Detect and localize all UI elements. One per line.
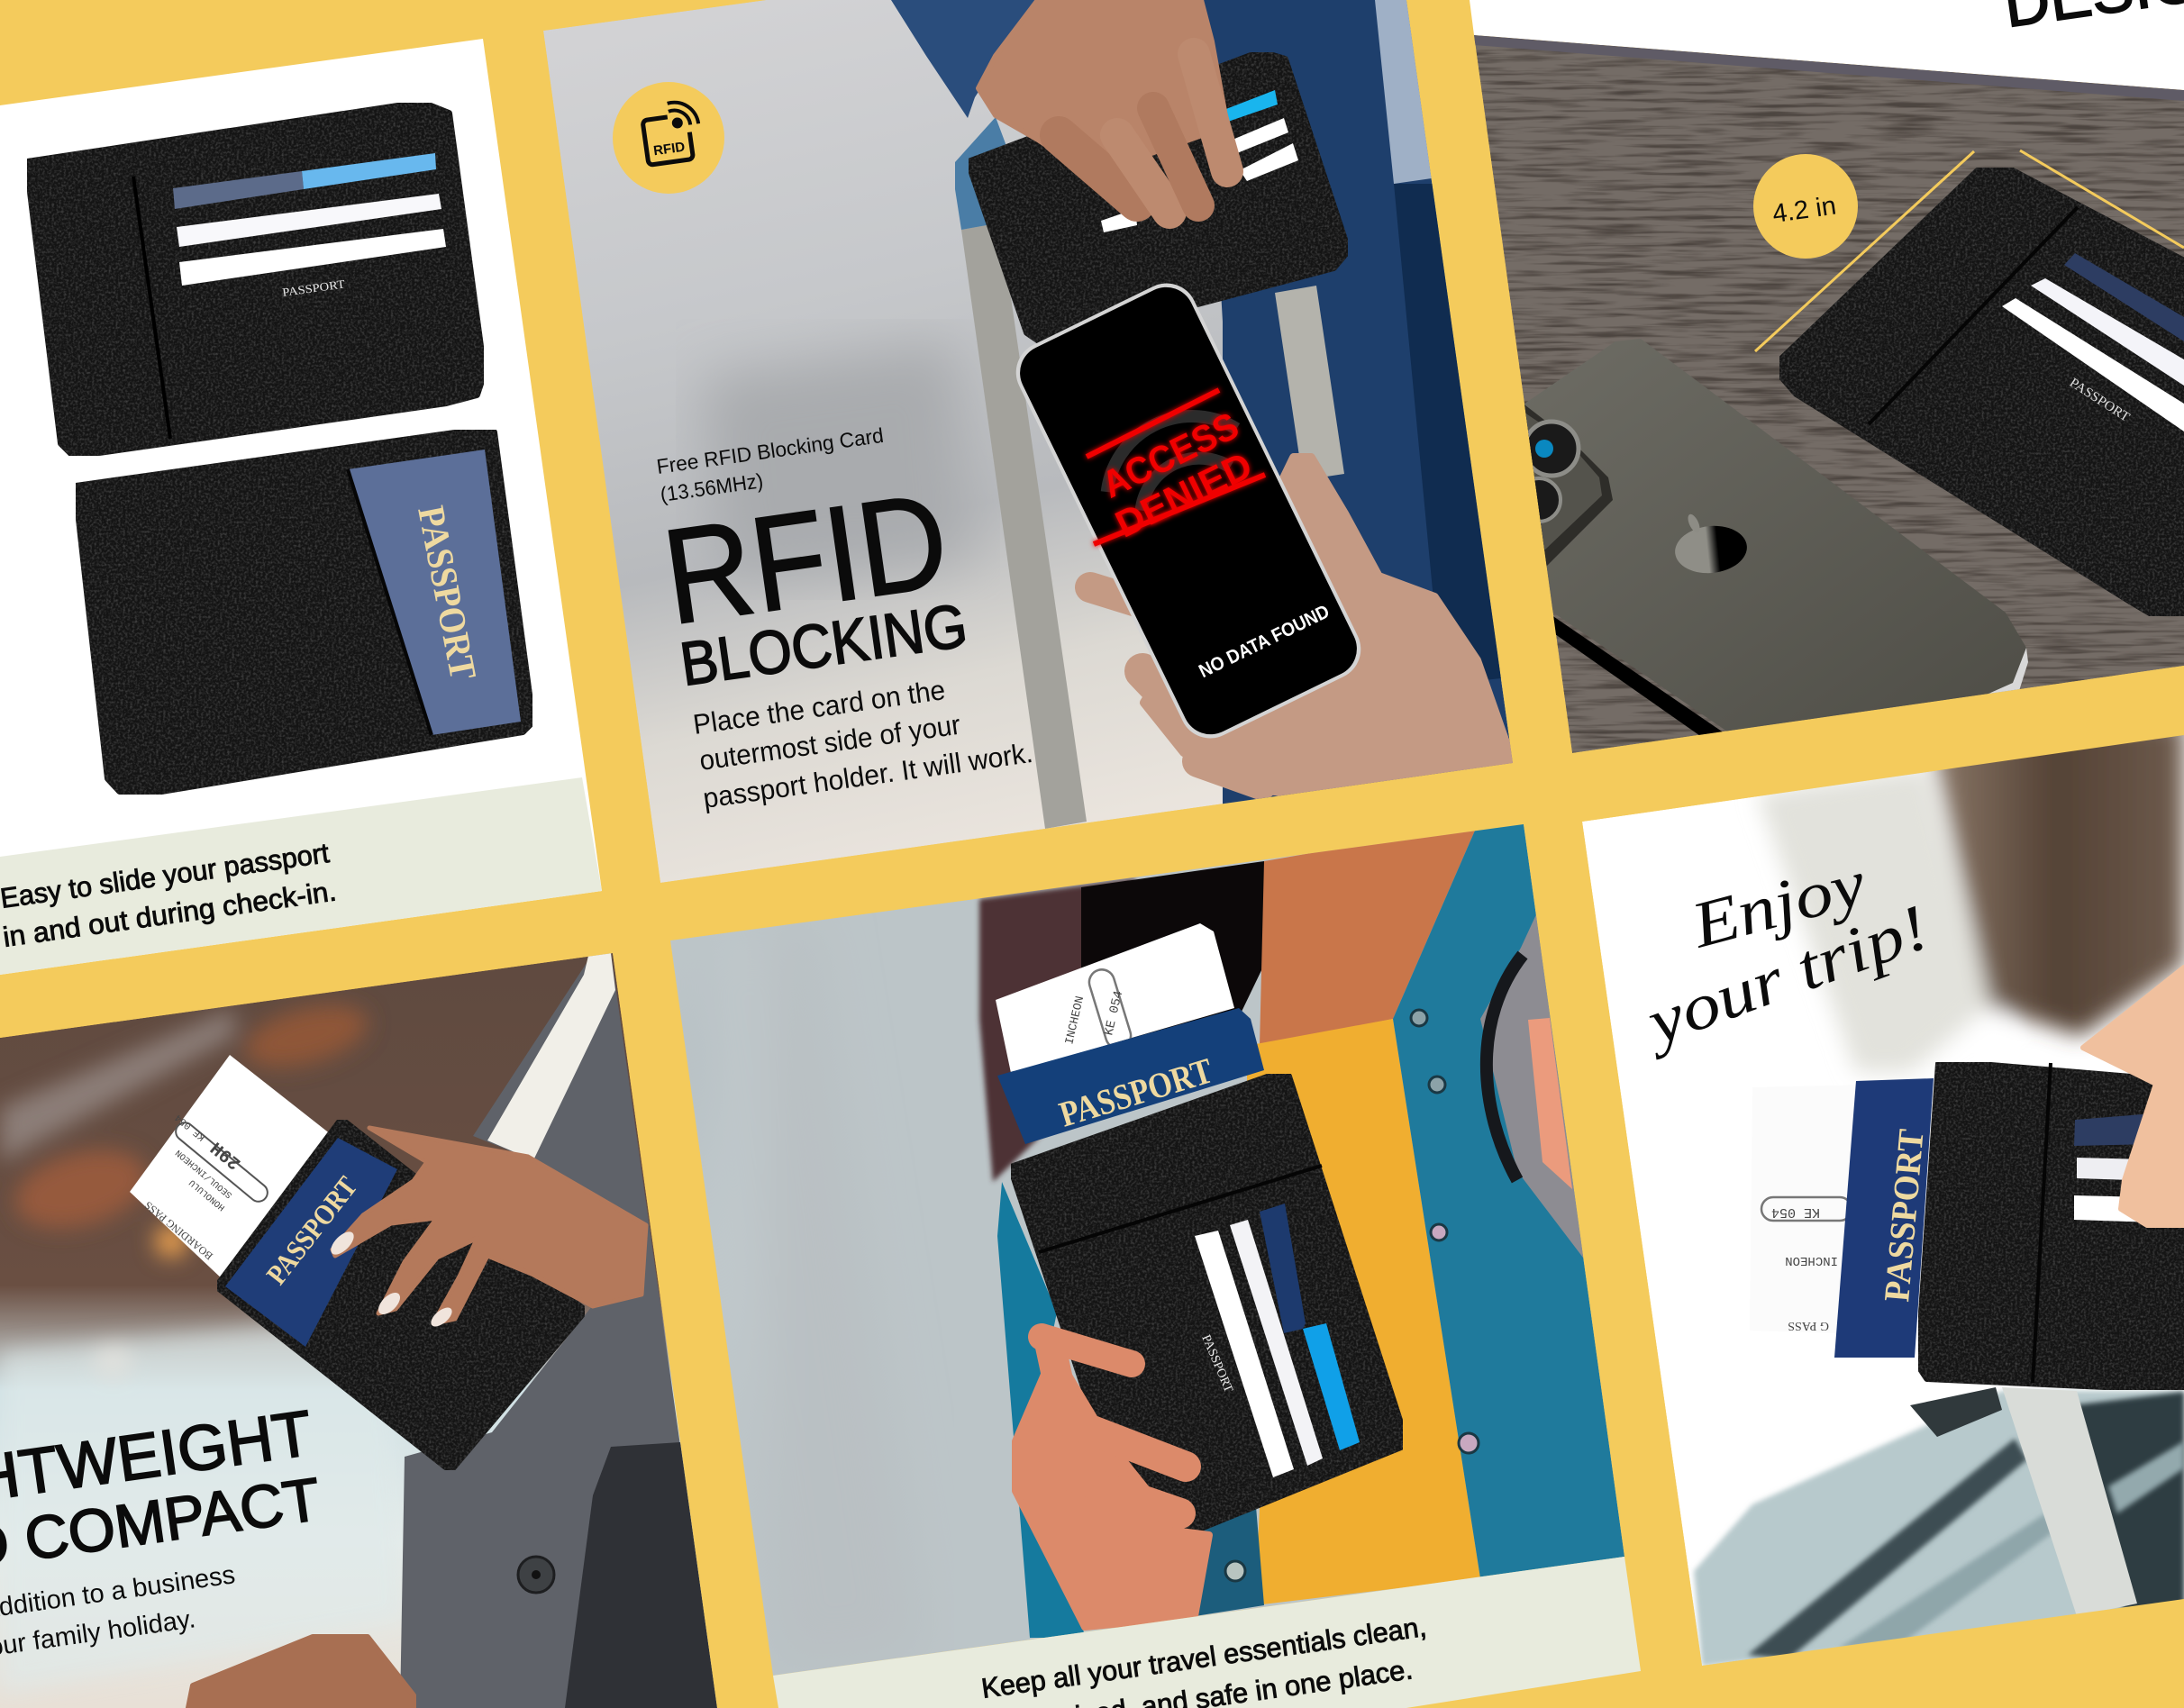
caption text: in and out during check-in.	[1, 875, 338, 953]
wallet with cards	[969, 52, 1348, 344]
heading: RFID blocking: RFID	[655, 464, 956, 653]
boarding pass: INCHEON	[1062, 995, 1087, 1046]
jacket	[891, 0, 1513, 804]
yellow shirt	[1246, 1019, 1480, 1605]
passport: PASSPORT	[1876, 1127, 1932, 1304]
hand	[2083, 968, 2184, 1225]
boarding pass: KE 054	[1102, 989, 1126, 1037]
caption text: Keep all your travel essentials clean,	[979, 1611, 1428, 1704]
wallet: PASSPORT	[2067, 376, 2132, 425]
wallet: passport pocket side	[76, 430, 532, 795]
wallet: card side	[27, 103, 484, 456]
suitcase	[1694, 1387, 2184, 1667]
body text: Place the card on the	[691, 674, 947, 740]
jacket button	[518, 1557, 554, 1593]
passport: PASSPORT	[1054, 1049, 1217, 1135]
camera bump	[1524, 404, 1613, 566]
boarding pass: INCHEON	[1785, 1253, 1838, 1267]
boarding pass: SEOUL/INCHEON	[174, 1147, 235, 1200]
passport	[225, 1138, 397, 1347]
dimension badge	[1753, 154, 1858, 259]
wallet: PASSPORT	[1198, 1333, 1235, 1395]
caption text: Easy to slide your passport	[0, 837, 332, 914]
dimension lines	[1755, 150, 2184, 351]
heading: RFID blocking: BLOCKING	[677, 591, 971, 699]
blurred backdrop	[1757, 721, 2184, 1072]
subtitle	[655, 423, 885, 506]
wifi blocked symbol	[1101, 410, 1240, 511]
no data found: NO DATA FOUND	[1196, 601, 1333, 682]
passport	[1834, 1078, 1934, 1358]
body text: passport holder. It will work.	[701, 737, 1034, 814]
body text	[0, 1560, 237, 1675]
blurred backdrop	[703, 342, 973, 577]
luggage handle	[2002, 1387, 2137, 1616]
bag	[565, 1442, 717, 1708]
caption band	[773, 1557, 1641, 1708]
dimension badge: 4.2 in	[1770, 191, 1838, 229]
panel: enjoy your trip	[1582, 721, 2184, 1667]
boarding pass: KE 054	[1771, 1204, 1820, 1220]
boarding pass: HONOLULU	[188, 1177, 228, 1212]
panel: easy to slide passport	[0, 39, 602, 975]
boarding pass	[130, 1055, 335, 1282]
boarding pass: BOARDING PASS	[142, 1199, 215, 1262]
hand	[327, 1128, 646, 1330]
body text	[691, 674, 1034, 814]
caption band	[0, 777, 602, 975]
wallet	[1918, 1062, 2184, 1390]
jacket	[400, 953, 717, 1708]
white header strip	[1470, 0, 2184, 90]
panel: keep essentials clean	[670, 824, 1641, 1708]
hand holding wallet	[978, 0, 1227, 212]
heading: lightweight and compact	[0, 1398, 324, 1594]
lower hand	[188, 1637, 414, 1708]
panel: dimensions on desk	[1470, 0, 2184, 753]
neck	[1260, 824, 1478, 1046]
wallet	[1011, 1074, 1403, 1545]
boarding pass	[996, 923, 1234, 1073]
panel: RFID blocking	[543, 0, 1513, 883]
wallet: passport pocket side: PASSPORT	[409, 503, 484, 683]
passport	[997, 1008, 1264, 1144]
boarding pass: KE 054	[173, 1111, 208, 1142]
body text: outermost side of your	[697, 709, 962, 777]
panel: lightweight and compact	[0, 953, 717, 1708]
denim buttons	[1225, 1010, 1479, 1581]
script heading: Enjoy	[1683, 847, 1873, 962]
hand	[1015, 1337, 1209, 1627]
icon: RFID badge: RFID	[652, 140, 686, 159]
caption text	[0, 837, 338, 953]
hair	[979, 861, 1264, 1182]
boarding pass: 29H	[207, 1137, 245, 1173]
wallet	[1779, 168, 2184, 616]
shirt	[487, 953, 615, 1160]
blurred backdrop	[670, 919, 928, 1676]
wallet	[217, 1120, 585, 1470]
desk surface	[1474, 35, 2184, 753]
icon: RFID badge	[613, 82, 724, 194]
phone	[1006, 273, 1371, 749]
heading: RFID blocking	[669, 498, 966, 686]
smartphone	[1496, 339, 2028, 744]
wallet: card side: PASSPORT	[281, 277, 346, 299]
script heading: your trip!	[1631, 891, 1938, 1061]
hand holding phone	[1090, 458, 1513, 794]
script heading	[1631, 847, 1938, 1061]
subtitle: (13.56MHz)	[659, 468, 765, 506]
boarding pass: G PASS	[1788, 1319, 1829, 1332]
access denied: DENIED	[1109, 443, 1259, 546]
access denied	[1104, 411, 1254, 541]
red lines	[1087, 390, 1265, 544]
denim jacket	[997, 824, 1624, 1638]
luggage handle	[955, 117, 1344, 829]
backpack strap	[1480, 901, 1586, 1261]
subtitle: Free RFID Blocking Card	[655, 423, 885, 478]
blurred background	[0, 994, 405, 1694]
icon: logo on phone	[1673, 513, 1749, 577]
passport: PASSPORT	[259, 1170, 363, 1290]
access denied: ACCESS	[1096, 404, 1245, 506]
boarding pass	[1750, 1085, 1865, 1333]
